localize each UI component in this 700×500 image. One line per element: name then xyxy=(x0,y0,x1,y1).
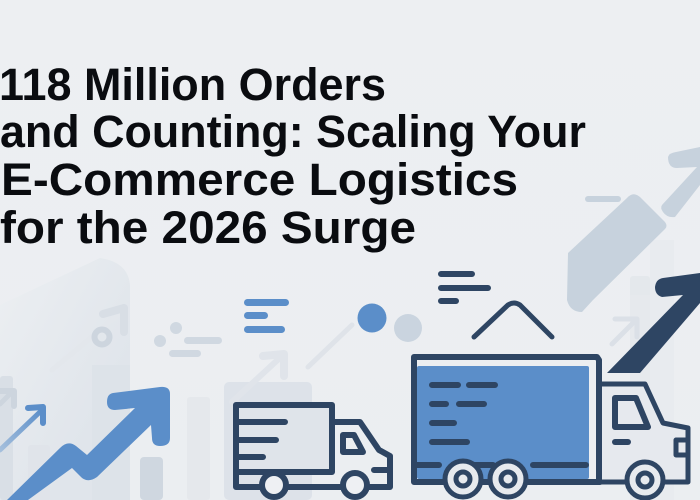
list and chevron above large truck xyxy=(441,274,552,337)
large blue growth arrow xyxy=(7,387,170,500)
large truck icon xyxy=(414,357,689,498)
small blue arrow xyxy=(0,407,43,450)
large dark arrow xyxy=(607,273,700,373)
small truck icon xyxy=(236,405,390,497)
title: for the 2026 Surge xyxy=(0,202,416,253)
blue and grey circles xyxy=(358,304,422,342)
background faded arrows and dots xyxy=(0,308,637,406)
blue list icon xyxy=(244,299,289,333)
title: and Counting: Scaling Your xyxy=(0,106,586,157)
title: E-Commerce Logistics xyxy=(1,154,518,205)
large grey arrow xyxy=(567,147,700,312)
title: 118 Million Orders xyxy=(0,59,386,110)
background faded bar chart xyxy=(0,240,674,500)
decorative dots and dashes xyxy=(154,322,222,357)
title xyxy=(0,59,586,253)
